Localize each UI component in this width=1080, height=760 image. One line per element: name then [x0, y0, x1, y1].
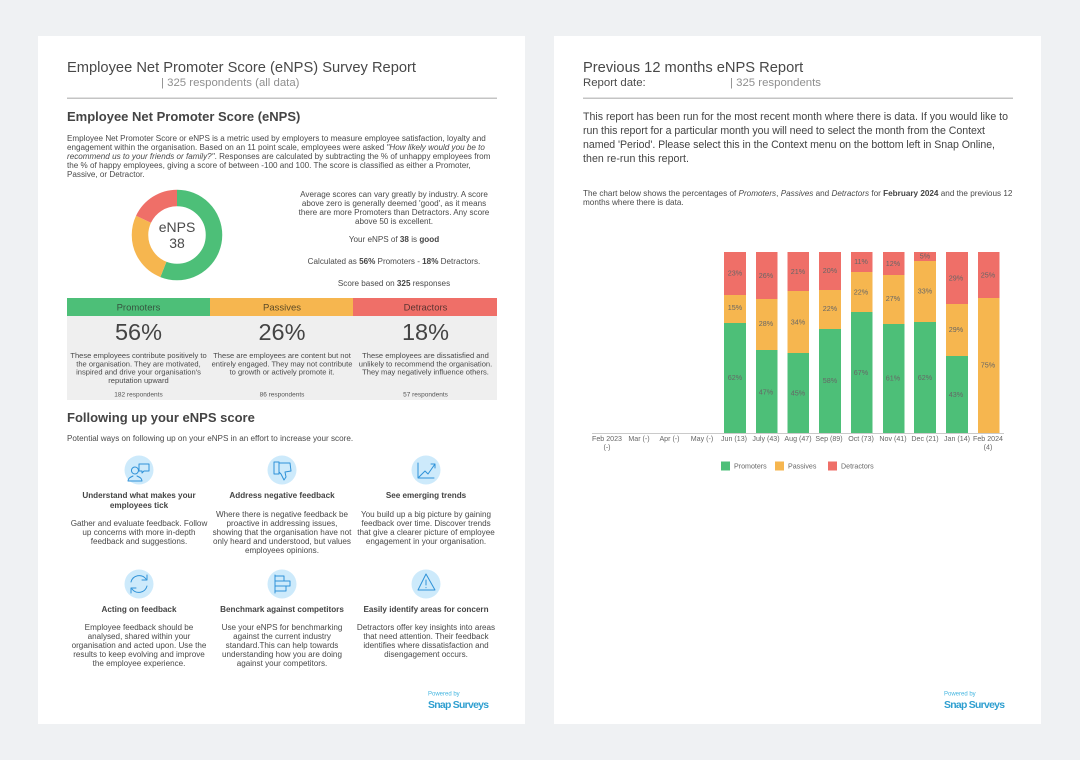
icon: warning triangle [412, 570, 440, 598]
column: passives [210, 298, 354, 398]
donut chart: eNPS score [140, 198, 214, 272]
card: areas for concern: Easily identify areas for concern [363, 605, 489, 614]
text block: chart description: The chart below shows the percentages of Promoters, Passives and Detractors for February 2024 and the previous 12 [583, 189, 1013, 198]
icon: horizontal bars [268, 570, 296, 598]
bar: February 2024 [978, 252, 1000, 433]
text block: eNPS introduction: Passive, or Detractor. [67, 170, 145, 179]
text block: report instructions: run this report for a particular month you will need to select the month from the Context [583, 125, 985, 137]
panel: previous 12 months report page [554, 36, 1041, 724]
bar: July: 28% [759, 319, 774, 328]
card: understand employees [71, 456, 207, 546]
x axis labels: Aug (47) [784, 435, 812, 443]
text block: score explanation: Average scores can vary greatly by industry. A score [300, 190, 488, 199]
bar: September: 22% [823, 304, 838, 313]
x axis labels: Feb 2023 [592, 435, 622, 443]
bar: November: 12% [886, 259, 901, 268]
title: Employee Net Promoter Score (eNPS) Survey Report [67, 60, 416, 76]
bar: July: 47% [759, 388, 774, 396]
text block: eNPS introduction: Employee Net Promoter Score or eNPS is a metric used by employers to measure employee satisfaction, loyalty and [67, 134, 486, 143]
bar: December: 5% [920, 252, 931, 260]
title [583, 60, 821, 89]
x axis labels: Sep (89) [815, 435, 843, 443]
card: understand employees: Gather and evaluate feedback. Follow [71, 519, 207, 528]
column: passives: entirely engaged. They may not contribute [212, 360, 352, 368]
bar: October: 67% [854, 368, 869, 377]
legend: Passives [788, 462, 817, 470]
icon: refresh arrows [124, 570, 154, 598]
bar: February 2024: 25% [981, 270, 996, 280]
bar: November [883, 252, 904, 433]
bar: August: 21% [791, 267, 806, 276]
bar: October [851, 252, 872, 433]
column: passives: 86 respondents [260, 392, 305, 398]
column: passives: to growth or actively promote it. [230, 368, 334, 376]
card: benchmark [220, 570, 344, 668]
bar: August [788, 252, 809, 433]
text block: score explanation: there are more Promoters than Detractors. Any score [299, 208, 490, 217]
text block: score explanation [299, 190, 490, 288]
card: acting on feedback: analysed, shared within your [88, 632, 191, 641]
card: acting on feedback: the employee experience. [93, 659, 185, 668]
title [67, 60, 416, 89]
title: Previous 12 months eNPS Report [583, 60, 803, 76]
card: acting on feedback: organisation and acted upon. Use the [72, 641, 207, 650]
bar: December: 62% [918, 373, 933, 382]
donut chart: eNPS score: 38 [169, 235, 185, 251]
bar: August: 45% [791, 388, 806, 398]
title: Report date: [583, 77, 646, 89]
column: promoters: Promoters [117, 302, 161, 314]
column: promoters: 182 respondents [114, 392, 163, 398]
card: areas for concern: that need attention. Their feedback [363, 632, 490, 641]
column: promoters: These employees contribute positively to [70, 351, 207, 360]
bar: January: 43% [949, 390, 964, 399]
card: areas for concern: disengagement occurs. [384, 650, 468, 659]
x axis labels: Jan (14) [944, 435, 970, 443]
card: understand employees: up concerns with more in-depth [82, 528, 196, 537]
column: promoters: the organisation. They are motivated, [76, 360, 201, 368]
text block: eNPS introduction: engagement within the organisation. Based on an 11 point scale, employees were asked "How likely would you be to [67, 143, 485, 152]
text block: report instructions: then re-run this report. [583, 153, 689, 165]
bar: October: 22% [854, 288, 869, 296]
bar: September: 20% [823, 266, 838, 275]
legend [721, 462, 874, 470]
card: acting on feedback: Employee feedback should be [85, 623, 194, 632]
card: benchmark: against your competitors. [237, 659, 327, 668]
bar: January [946, 252, 968, 433]
card: areas for concern [357, 570, 495, 659]
card: benchmark: understanding how you are doing [222, 650, 342, 659]
bar: February 2024: 75% [981, 360, 996, 370]
icon: trend chart [412, 456, 440, 484]
bar: June: 15% [728, 303, 743, 312]
card: benchmark: standard.This can help towards [226, 641, 338, 650]
logo: Snap Surveys [428, 692, 489, 711]
card: acting on feedback [72, 570, 207, 668]
card: understand employees: employees tick [110, 501, 169, 510]
column: passives: 26% [258, 319, 306, 345]
text block: eNPS introduction: the % of happy employees, giving a score of between -100 and 100. The score is classified as either a Promoter, [67, 161, 471, 170]
bar: July [756, 252, 778, 433]
bar: January: 29% [949, 274, 964, 282]
x axis labels: Nov (41) [879, 435, 907, 443]
x axis labels: Apr (-) [659, 435, 680, 443]
text block: score explanation: above zero is generally deemed 'good', as it means [302, 199, 486, 208]
text block: eNPS introduction [67, 134, 491, 179]
column: detractors [353, 298, 497, 398]
text block: score explanation: Calculated as 56% Promoters - 18% Detractors. [308, 257, 480, 266]
column: detractors: unlikely to recommend the organisation. [359, 360, 492, 368]
card: areas for concern: identifies where dissatisfaction and [363, 641, 489, 650]
card: negative feedback: proactive in addressing issues, [227, 519, 337, 528]
bar: June: 62% [728, 373, 743, 382]
legend: Detractors [841, 462, 874, 470]
title: | 325 respondents (all data) [161, 77, 300, 89]
bar: September: 58% [823, 376, 838, 385]
text block: report instructions: This report has been run for the most recent month where there is data. If you would like to [583, 111, 1008, 123]
bar: December: 33% [918, 286, 933, 296]
logo: Snap Surveys: Snap Surveys [428, 700, 489, 711]
text block: score explanation: Your eNPS of 38 is good [349, 235, 439, 244]
x axis labels: Oct (73) [848, 435, 874, 443]
column: detractors: Detractors [404, 302, 448, 314]
column: passives: Passives [263, 302, 301, 314]
column: promoters: inspired and drive your organisation's [76, 368, 201, 376]
text block: eNPS introduction: recommend us to your friends or family?". Responses are calculated by subtracting the % of unhappy employees from [67, 152, 491, 161]
text block: chart description: months where there is data. [583, 198, 684, 207]
heading: eNPS: Employee Net Promoter Score (eNPS) [67, 109, 300, 124]
card: acting on feedback: results to keep evolving and improve [73, 650, 205, 659]
card: emerging trends: feedback over time. Discover trends [361, 519, 491, 528]
bar: January: 29% [949, 325, 964, 334]
bar: June: 23% [728, 268, 743, 278]
card: emerging trends: You build up a big picture by gaining [361, 510, 491, 519]
x axis labels: Jun (13) [721, 435, 747, 443]
text block: following up introduction: Potential ways on following up on your eNPS in an effort to increase your score. [67, 434, 353, 443]
card: benchmark: against the current industry [233, 632, 332, 641]
panel: score breakdown [67, 298, 497, 400]
card: negative feedback: showing that the organisation have not [213, 528, 352, 537]
title: | 325 respondents [730, 77, 821, 89]
card: acting on feedback: Acting on feedback [102, 605, 177, 614]
bar: July: 26% [759, 271, 774, 280]
logo: Snap Surveys [944, 692, 1005, 711]
x axis labels: Feb 2024 [973, 435, 1003, 443]
x axis labels: May (-) [691, 435, 713, 443]
card: negative feedback [213, 456, 352, 555]
bar: November: 27% [886, 294, 901, 303]
card: emerging trends: See emerging trends [386, 491, 467, 500]
bar: October: 11% [854, 257, 869, 266]
column: promoters [67, 298, 210, 398]
legend: Promoters [734, 462, 767, 470]
bar: September [819, 252, 841, 433]
bar: August: 34% [791, 318, 806, 326]
bar: November: 61% [886, 374, 901, 382]
text block: report instructions: named 'Period'. Please select this in the Context menu on the bottom left in Snap Online, [583, 139, 995, 151]
logo: Snap Surveys: Snap Surveys [944, 700, 1005, 711]
column: passives: These are employees are content but not [213, 351, 352, 360]
card: emerging trends: that give a clearer picture of employee [357, 528, 495, 537]
x axis labels: Mar (-) [628, 435, 650, 443]
column: promoters: reputation upward [108, 376, 169, 385]
column: detractors: 18% [402, 319, 449, 345]
stacked bar chart: monthly eNPS breakdown [592, 252, 1004, 470]
column: promoters: 56% [115, 319, 162, 345]
x axis labels: July (43) [752, 435, 780, 443]
icon: thumbs down [268, 456, 296, 484]
logo: Snap Surveys: Powered by [944, 692, 976, 698]
heading: following up: Following up your eNPS score [67, 410, 255, 425]
column: detractors: 57 respondents [403, 392, 449, 398]
card: areas for concern: Detractors offer key insights into areas [357, 623, 495, 632]
logo: Snap Surveys: Powered by [428, 692, 460, 698]
card: emerging trends: engagement in your organisation. [366, 537, 486, 546]
donut chart: eNPS score: eNPS [159, 219, 195, 235]
bar: December [914, 252, 936, 433]
card: understand employees: feedback and suggestions. [91, 537, 187, 546]
card: negative feedback: only heard and understood, but values [213, 537, 351, 546]
column: detractors: They may negatively influence others. [362, 368, 489, 376]
text block: score explanation: above 50 is excellent. [355, 217, 433, 226]
card: negative feedback: Where there is negative feedback be [216, 510, 349, 519]
x axis labels: (-) [603, 444, 611, 452]
x axis labels: Dec (21) [911, 435, 939, 443]
x axis labels [592, 435, 1003, 452]
card: negative feedback: employees opinions. [245, 546, 319, 555]
text block: chart description [583, 189, 1013, 207]
x axis labels: (4) [984, 444, 992, 452]
card: emerging trends [357, 456, 495, 546]
column: detractors: These employees are dissatisfied and [362, 351, 489, 360]
card: negative feedback: Address negative feedback [229, 491, 335, 500]
bar: June [724, 252, 746, 433]
text block: score explanation: Score based on 325 responses [338, 279, 450, 288]
card: benchmark: Benchmark against competitors [220, 605, 344, 614]
card: understand employees: Understand what makes your [82, 491, 196, 500]
card: benchmark: Use your eNPS for benchmarking [222, 623, 342, 632]
text block: report instructions [583, 111, 1008, 165]
icon: person with speech bubble [124, 456, 154, 484]
panel: eNPS survey report page [38, 36, 525, 724]
